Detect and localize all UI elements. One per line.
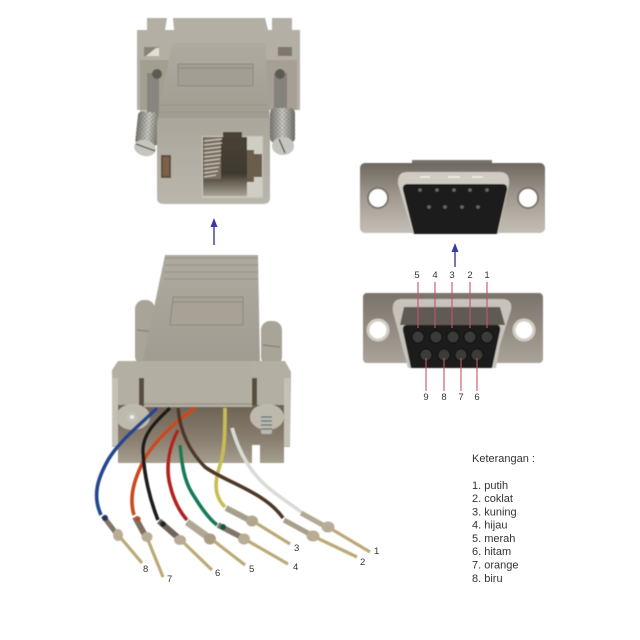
legend: 4. hijau [472, 520, 507, 532]
DB9 pin numbers: 3 [449, 270, 455, 281]
side screws [135, 300, 282, 366]
legend: 8. biru [472, 573, 503, 585]
legend: Keterangan : [472, 453, 535, 465]
DB9 pin numbers [414, 270, 490, 403]
DB9 pin numbers: 9 [423, 392, 429, 403]
wire number labels: 5 [249, 564, 254, 575]
legend: 5. merah [472, 533, 515, 545]
photo: female DB9 connector [363, 293, 543, 368]
wire number labels: 2 [360, 557, 365, 568]
DB9 pin numbers: 1 [484, 270, 490, 281]
right thumbscrew [270, 69, 295, 155]
wire: red [168, 430, 187, 520]
adapter flange and tabs [137, 18, 300, 120]
pin 8 [102, 515, 142, 563]
DB9 pin numbers: 5 [414, 270, 420, 281]
wire number labels: 8 [143, 564, 148, 575]
black insert with pins [403, 177, 507, 234]
DB9 pin numbers: 2 [467, 270, 473, 281]
metal plate [363, 293, 543, 363]
DB9 pin numbers: 7 [458, 392, 464, 403]
pin 3 [226, 508, 290, 544]
wire number labels: 6 [215, 568, 220, 579]
pin lead lines [418, 282, 487, 391]
photo: RJ45 adapter, back view [97, 255, 370, 577]
flange [112, 361, 291, 463]
metal plate [360, 160, 545, 233]
legend: 1. putih [472, 480, 508, 492]
wire: orange [132, 408, 195, 515]
legend: 7. orange [472, 560, 518, 572]
left thumbscrew [132, 69, 162, 159]
wire: white [232, 428, 301, 512]
pin 7 [135, 516, 163, 577]
arrow: top adapter [210, 218, 218, 245]
DB9 pin numbers: 8 [441, 392, 447, 403]
photo: RJ45 adapter, front view [132, 18, 300, 204]
wire: yellow [216, 408, 225, 507]
hood [142, 255, 260, 365]
DB9 pin numbers: 6 [474, 392, 480, 403]
pin 6 [159, 521, 212, 570]
pin 4 [218, 524, 288, 564]
wire: brown [178, 408, 283, 518]
adapter front face with RJ45 socket [157, 118, 270, 204]
legend: 6. hitam [472, 546, 511, 558]
wire number labels [143, 543, 379, 585]
connector shell [393, 299, 511, 368]
screw post left [116, 404, 150, 430]
black socket insert [403, 325, 500, 368]
photo: male DB9 connector [360, 160, 545, 234]
legend [472, 453, 535, 585]
wire number labels: 1 [374, 546, 379, 557]
screw post right [250, 404, 284, 434]
legend: 2. coklat [472, 493, 513, 505]
connector shell [398, 172, 509, 234]
adapter hood [157, 43, 270, 122]
arrow: DB9 [452, 243, 458, 267]
wire number labels: 7 [167, 574, 172, 585]
pin 2 [284, 520, 357, 557]
legend: 3. kuning [472, 506, 517, 518]
DB9 pin numbers: 4 [432, 270, 438, 281]
pin 1 [301, 513, 370, 552]
wire number labels: 4 [293, 562, 298, 573]
pin 5 [187, 522, 245, 565]
wire: green [180, 445, 217, 525]
wire: black [143, 408, 170, 520]
wire number labels: 3 [294, 543, 299, 554]
wire: blue [97, 408, 157, 515]
